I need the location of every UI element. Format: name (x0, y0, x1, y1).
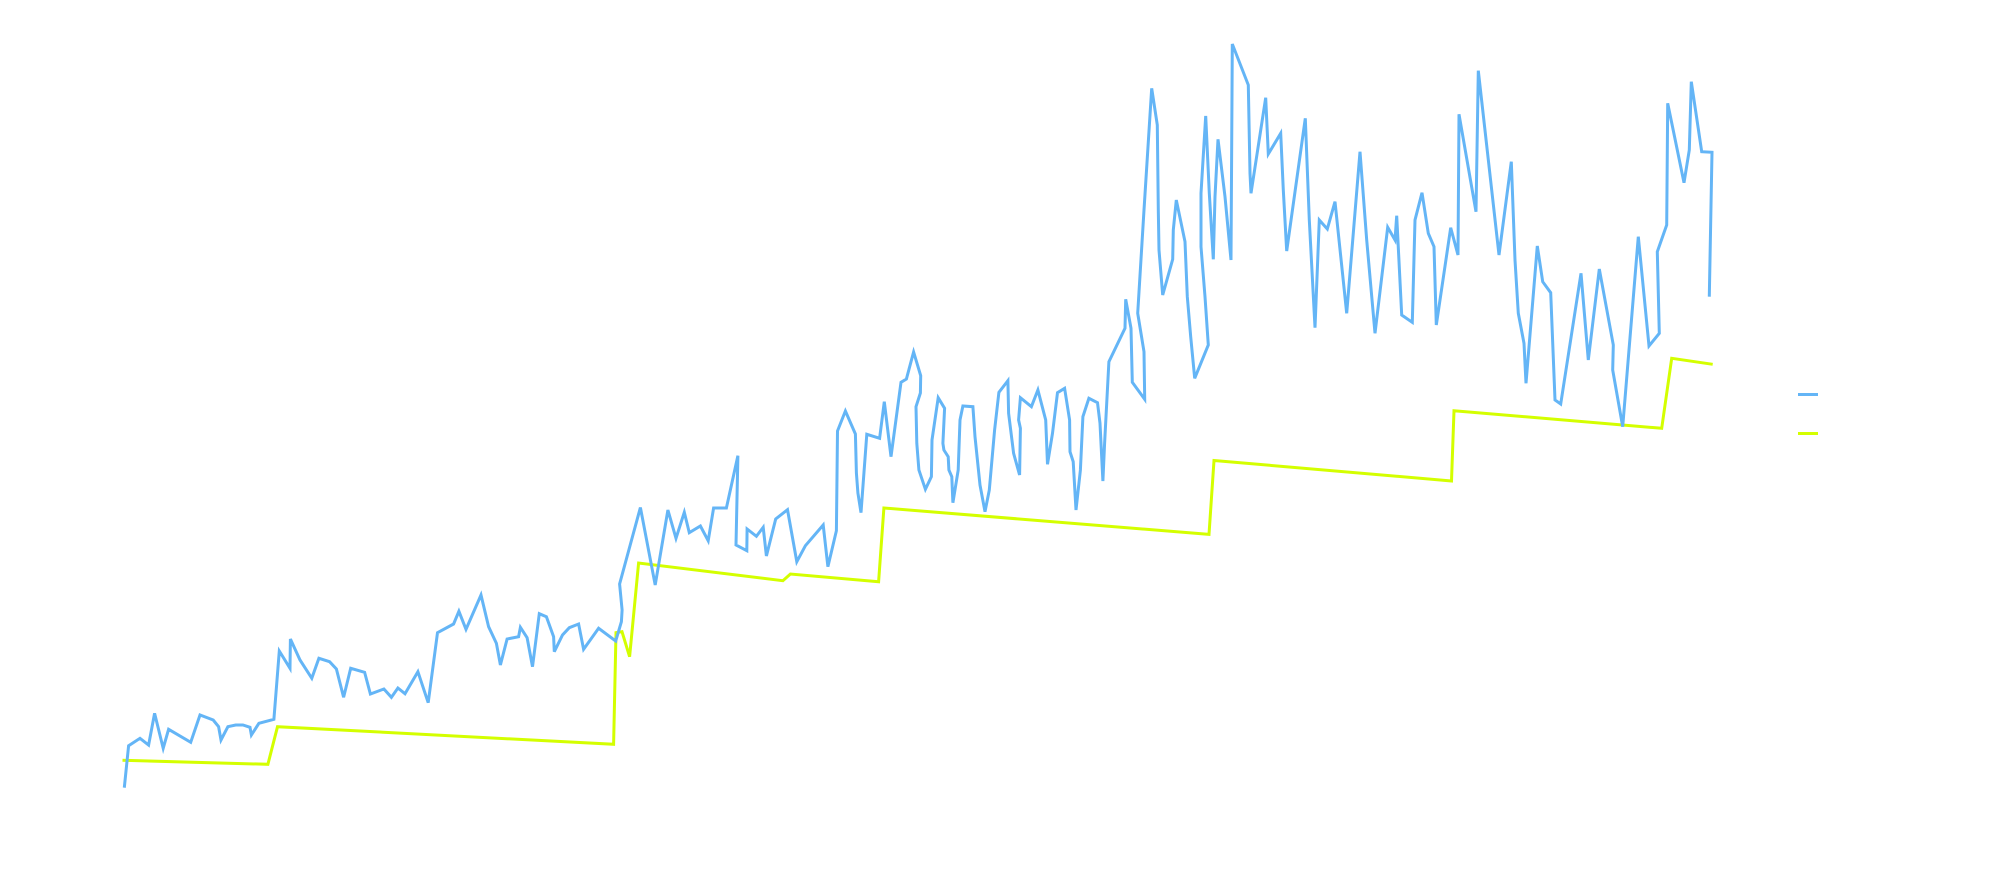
legend swatch: blue (1798, 393, 1818, 396)
legend (1798, 393, 1818, 435)
line series: blue volatile series (124, 44, 1712, 788)
line series: yellow stepped series (122, 358, 1713, 764)
legend swatch: yellow (1798, 432, 1818, 435)
